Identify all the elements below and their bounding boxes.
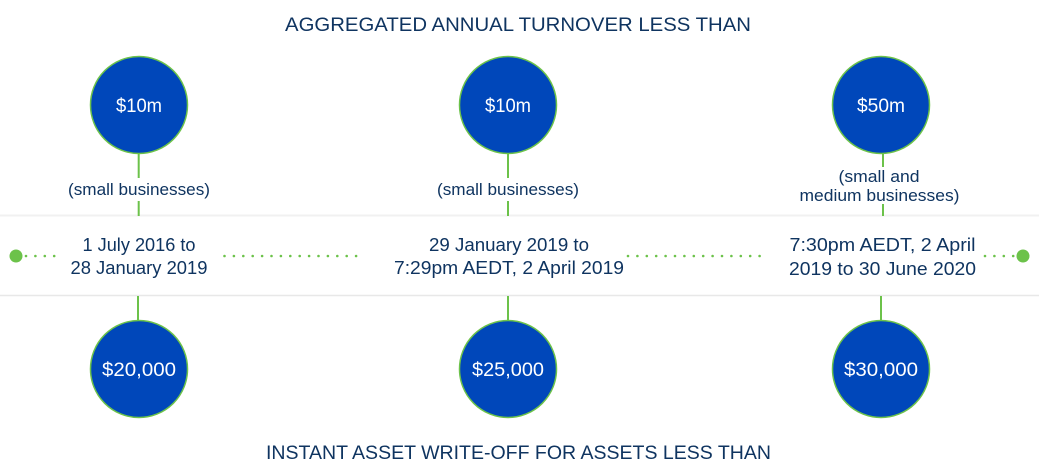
column 2 turnover: $10m: $10m [485,96,531,117]
write-off 3: $30,000 [832,296,930,418]
write-off 2: $25,000 [460,296,556,418]
column 3 turnover: $50m: $50m [857,96,905,117]
date range 3: 7:30pm AEDT, 2 April [790,234,976,255]
column 3 turnover: $50m [800,56,960,216]
heading: aggregated annual turnover: AGGREGATED ANNUAL TURNOVER LESS THAN [285,14,751,36]
date range 1 [70,234,208,278]
date range 3: 2019 to 30 June 2020 [789,258,976,279]
timeline dotted line [10,250,1030,262]
column 2 turnover: $10m: (small businesses) [437,180,579,199]
write-off 1: $20,000: $20,000 [102,360,176,381]
date range 1: 1 July 2016 to [82,234,196,255]
column 1 turnover: $10m: (small businesses) [68,180,210,199]
column 3 turnover: $50m: (small and [838,167,920,186]
column 2 turnover: $10m [437,56,579,216]
column 3 turnover: $50m: medium businesses) [800,186,960,205]
write-off 2: $25,000: $25,000 [472,360,544,381]
date range 1: 28 January 2019 [70,257,208,278]
write-off 3: $30,000: $30,000 [844,360,918,381]
date range 2 [394,234,624,278]
date range 2: 7:29pm AEDT, 2 April 2019 [394,257,624,278]
column 1 turnover: $10m: $10m [116,96,162,117]
heading: instant asset write-off: INSTANT ASSET WRITE-OFF FOR ASSETS LESS THAN [266,442,771,464]
date range 3 [789,234,976,279]
column 1 turnover: $10m [68,56,210,216]
date range 2: 29 January 2019 to [429,234,589,255]
write-off 1: $20,000 [90,296,188,418]
